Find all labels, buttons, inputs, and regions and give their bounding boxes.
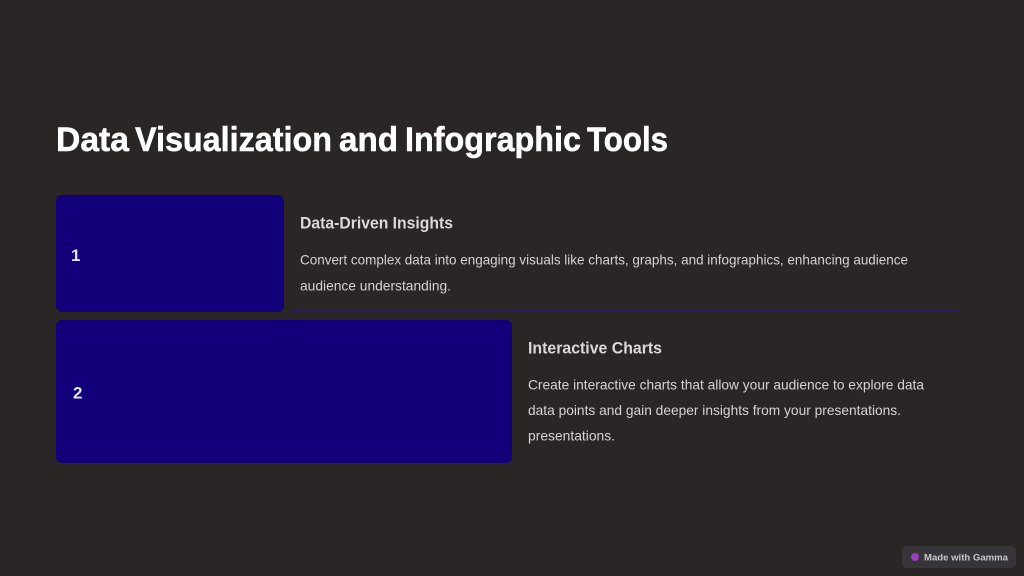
step 1 number: 1 bbox=[71, 246, 80, 265]
title: Tools bbox=[587, 121, 668, 159]
step 2 heading: Interactive Charts bbox=[528, 338, 662, 358]
title: Infographic bbox=[405, 121, 581, 159]
step 2 number box bbox=[56, 320, 512, 463]
icon: Gamma logo bbox=[911, 553, 919, 561]
step 1 body text bbox=[300, 252, 908, 294]
panel: step 1 bbox=[56, 195, 908, 312]
step 2 body text bbox=[528, 376, 924, 444]
title: and bbox=[339, 121, 398, 159]
step 1 number box bbox=[56, 195, 284, 312]
title: Visualization bbox=[135, 121, 332, 159]
panel: step 2 bbox=[56, 320, 924, 463]
step 2 body text: Create interactive charts that allow your audience to explore data bbox=[528, 376, 924, 392]
badge label: Made with Gamma bbox=[924, 552, 1009, 564]
step 2 body text: data points and gain deeper insights from your presentations. bbox=[528, 402, 901, 418]
step 1 heading: Data-Driven Insights bbox=[300, 214, 453, 232]
title: Data bbox=[56, 121, 130, 159]
step 1 body text: audience understanding. bbox=[300, 278, 451, 294]
title bbox=[56, 121, 668, 159]
step 1 body text: Convert complex data into engaging visuals like charts, graphs, and infographics, enhancing audience bbox=[300, 252, 908, 268]
step 2 body text: presentations. bbox=[528, 428, 615, 444]
badge: Made with Gamma bbox=[902, 546, 1016, 568]
step 2 number: 2 bbox=[73, 384, 82, 402]
